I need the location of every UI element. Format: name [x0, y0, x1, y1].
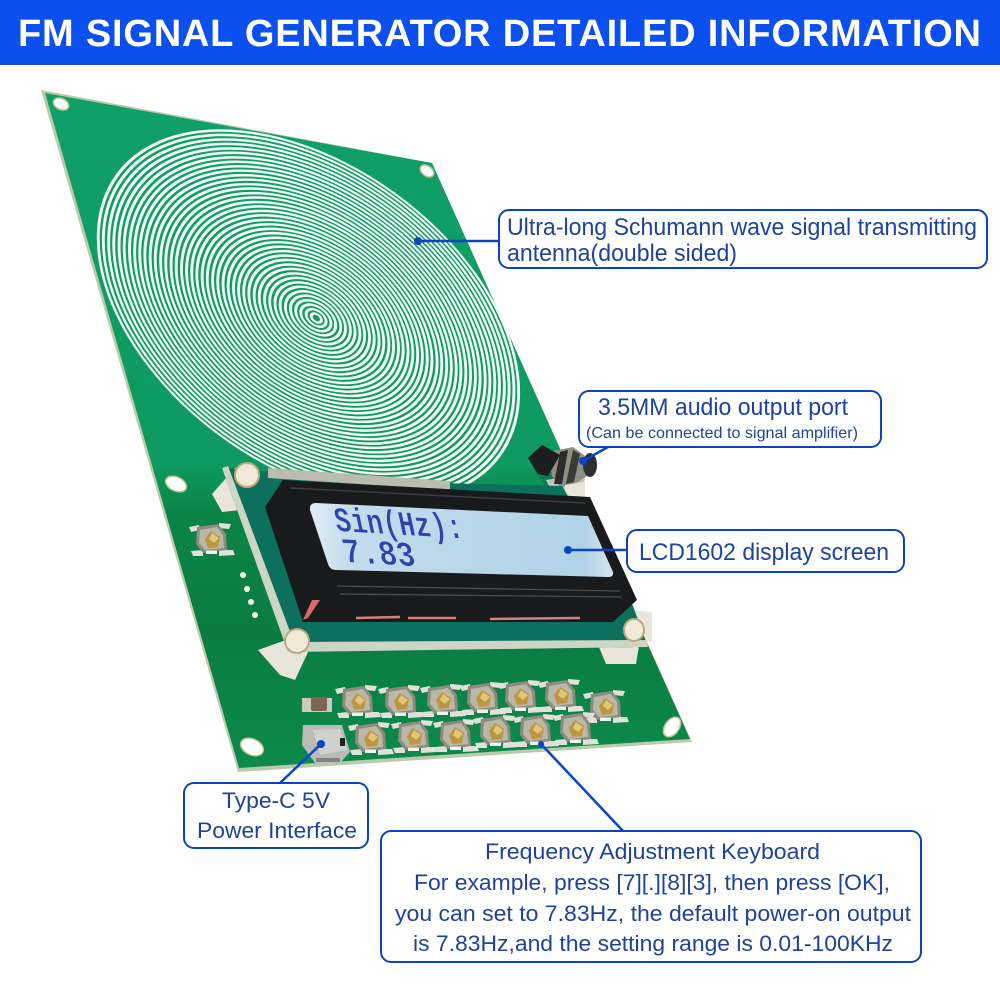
- reset button: [189, 523, 235, 556]
- header pins: [268, 468, 450, 490]
- callout: Type-C: Type-C 5V: [222, 788, 330, 813]
- display frame: [265, 480, 637, 622]
- callout: Type-C: Power Interface: [197, 818, 357, 843]
- display readout: [331, 502, 467, 577]
- callout: antenna: [414, 210, 987, 268]
- callout: antenna: antenna(double sided): [507, 240, 737, 267]
- plastic standoffs: [212, 468, 652, 680]
- side contact pads: [240, 572, 258, 618]
- display screen: [310, 503, 613, 577]
- callout: audio port: 3.5MM audio output port: [598, 394, 848, 421]
- LCD carrier board: [222, 468, 648, 652]
- callout: LCD: LCD1602 display screen: [639, 539, 889, 566]
- front standoff posts: [235, 463, 644, 653]
- callout: audio port: [579, 391, 881, 465]
- display readout: 7.83: [339, 533, 419, 577]
- callout: LCD: [564, 530, 904, 572]
- callout: keyboard: For example, press [7][.][8][3], then press [OK],: [414, 870, 890, 895]
- callout: antenna: Ultra-long Schumann wave signal transmitting: [507, 214, 977, 241]
- title banner: FM SIGNAL GENERATOR DETAILED INFORMATION: [18, 13, 981, 55]
- audio jack: [528, 445, 597, 492]
- callout: keyboard: Frequency Adjustment Keyboard: [485, 839, 820, 864]
- capacitor: [302, 697, 332, 712]
- display readout: Sin(Hz):: [331, 502, 467, 550]
- USB power port: [302, 725, 350, 763]
- keyboard: [335, 679, 629, 755]
- callout: keyboard: [381, 741, 921, 962]
- antenna coil: [98, 70, 519, 560]
- callout: keyboard: you can set to 7.83Hz, the default power-on output: [395, 901, 911, 926]
- title banner: [0, 0, 1000, 65]
- LCD module: [212, 463, 652, 680]
- callout: audio port: (Can be connected to signal amplifier): [586, 425, 858, 442]
- circuit board: [41, 90, 692, 772]
- callout: Type-C: [184, 740, 368, 848]
- board mounting holes: [51, 96, 684, 759]
- callout: keyboard: is 7.83Hz,and the setting range is 0.01-100KHz: [413, 931, 893, 956]
